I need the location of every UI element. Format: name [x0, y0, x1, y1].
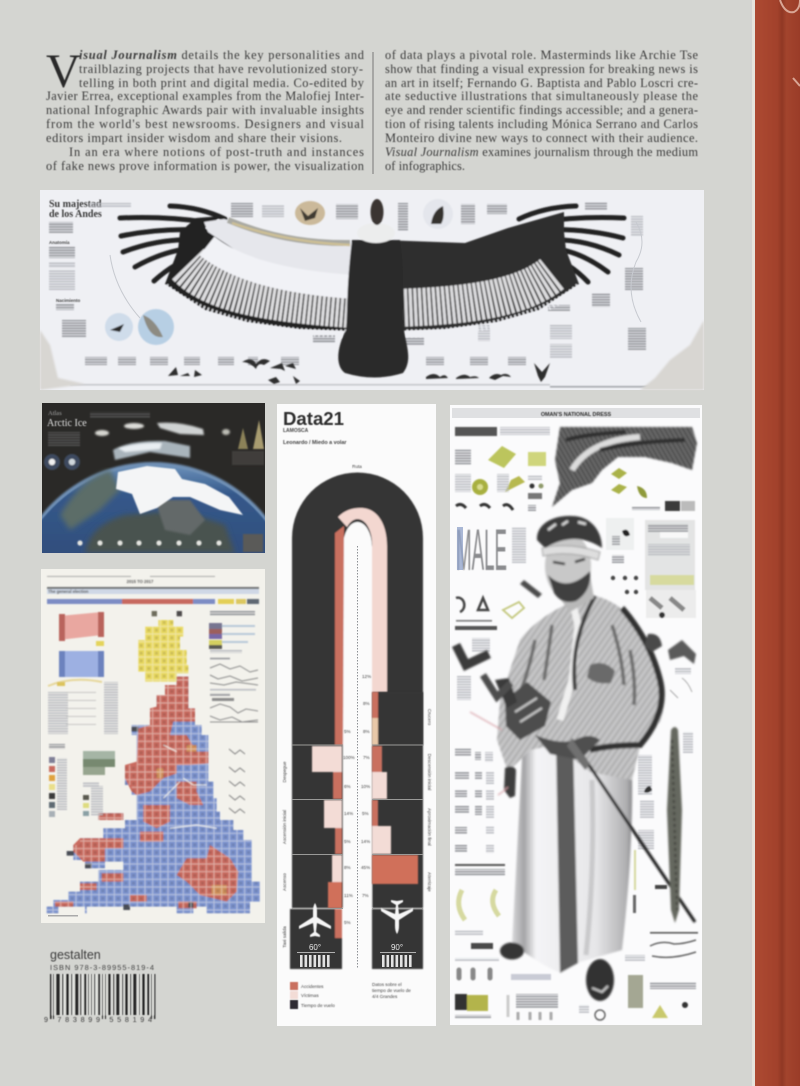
intro text: left column: editors impart insider wisdom and share their visions.: [46, 131, 342, 145]
rotated phase labels: Aproximación final: [427, 808, 432, 846]
beard: [548, 571, 590, 602]
drop cap: V: [46, 45, 81, 98]
Omani man illustration: [456, 516, 696, 1001]
yellow green illustrations: [472, 446, 647, 498]
rotated phase labels: Ascensión inicial: [282, 810, 287, 844]
feet: [500, 942, 524, 960]
intro text: right column: ate seductive illustrations that simultaneously please the: [385, 89, 698, 103]
neck: [550, 575, 594, 612]
cruise section: [332, 855, 342, 882]
percentage labels: 5%: [344, 839, 351, 844]
intro text: right column: eye and render scientific findings accessible; and a genera-: [385, 103, 698, 117]
chart legend: [290, 982, 335, 1009]
intro text: right column: of infographics.: [385, 159, 465, 173]
small flying condors row: [168, 359, 550, 384]
rotated phase labels: Despegue: [282, 761, 287, 782]
UK panel header: [47, 576, 259, 604]
condor heading: Su majestad: [49, 199, 102, 210]
chart legend: Accidentes: [301, 984, 324, 989]
condor heading: Anatomía: [49, 240, 70, 245]
rotated phase labels: Ascenso: [282, 873, 287, 891]
condor text blocks: [49, 202, 700, 388]
UK panel footer: [48, 915, 78, 916]
intro text: left column: [46, 45, 365, 173]
percentage labels: 7%: [363, 755, 370, 760]
section separator lines: [292, 744, 423, 909]
percentage labels: 8%: [363, 729, 370, 734]
percentage labels: 100%: [343, 755, 355, 760]
percentage labels: [343, 674, 371, 925]
head: [370, 199, 384, 225]
intro text: left column: In an era where notions of post-truth and instances: [69, 145, 364, 159]
earth globe: [42, 460, 265, 553]
polar ice: [116, 466, 243, 515]
chart note: [372, 982, 411, 999]
staff: [572, 740, 695, 922]
percentage labels: 6%: [344, 784, 351, 789]
percentage labels: 10%: [361, 784, 370, 789]
intro text: right column: of data plays a pivotal role. Masterminds like Archie Tse: [385, 48, 698, 62]
climb section: [324, 800, 342, 828]
Arctic dot timeline: [77, 534, 263, 552]
barcode: [50, 974, 155, 1019]
lower left diagrams: [455, 732, 698, 1020]
intro text: left column: telling in both print and digital media. Co-edited by: [79, 76, 365, 90]
Data21 heading: Ruta: [352, 464, 362, 469]
dress panel header: OMAN'S NATIONAL DRESS: [541, 412, 612, 418]
condor round insets: [105, 199, 453, 345]
intro text: left column: national Infographic Awards pair with invaluable insights: [46, 103, 364, 117]
Arctic panel title: [47, 410, 87, 429]
icon: takeoff plane: [299, 903, 331, 937]
intro text: right column: Visual Journalism examines journalism through the medium: [385, 145, 698, 159]
intro text: left column: isual Journalism details the key personalities and: [79, 48, 365, 62]
percentage labels: 11%: [344, 893, 353, 898]
arch shaped flight track: [292, 472, 423, 969]
turban: [537, 516, 602, 548]
pale mountains at condor panel edges: [40, 320, 704, 390]
robe: [512, 735, 632, 973]
rotated phase labels: [282, 709, 432, 948]
chart note: 4/4 Grandes: [372, 994, 398, 999]
MALE title: [456, 518, 507, 583]
intro text: right column: Monteiro divine new ways to connect with their audience.: [385, 131, 698, 145]
left wing: [120, 206, 356, 333]
UK panel header: 2015 TO 2017: [127, 579, 154, 584]
chart legend: Víctimas: [301, 993, 319, 998]
panel: Oman national dress infographic: MALE: [456, 518, 507, 583]
panel: Oman national dress infographic: [450, 405, 702, 1025]
intro text: right column: [385, 48, 698, 173]
white inner channel: [343, 522, 372, 969]
publisher name: gestalten: [50, 948, 101, 962]
right upper block: [372, 692, 423, 745]
pink pointer lines: [470, 712, 508, 795]
percentage labels: 45%: [361, 865, 370, 870]
barcode digits: 9 783899 558194: [44, 1015, 152, 1024]
red book spine: [752, 0, 800, 1086]
condor heading: [49, 199, 102, 303]
pink arch stripe: [338, 508, 387, 692]
intro text: left column: of fake news prove information is power, the visualization: [46, 159, 364, 173]
intro text: right column: an art in itself; Fernando G. Baptista and Pablo Loscri cre-: [385, 76, 698, 90]
seat flow charts: [48, 612, 118, 734]
percentage labels: 7%: [362, 893, 369, 898]
flight path arcs: [110, 222, 642, 322]
rotated phase labels: Taxi salida: [282, 926, 287, 948]
panel: Arctic earth infographic: [42, 403, 265, 553]
runway labels: 60°: [309, 943, 321, 952]
rotated phase labels: Crucero: [427, 709, 432, 726]
takeoff section: [312, 746, 342, 772]
small text blocks and diagrams, top: [455, 427, 696, 700]
runway labels: [297, 943, 416, 953]
face: [545, 533, 591, 599]
runway blocks: [290, 909, 342, 969]
sketched map of Oman: [552, 427, 697, 507]
intro text: left column: trailblazing projects that have revolutionized story-: [79, 62, 363, 76]
percentage labels: 5%: [344, 729, 351, 734]
Arctic bar charts: [48, 412, 264, 465]
clouds above the globe: [95, 423, 230, 460]
panel: condor infographic: [40, 190, 704, 390]
left hand: [504, 766, 516, 798]
percentage labels: 8%: [344, 865, 351, 870]
dagger at right: [644, 634, 662, 652]
Data21 heading: Data21: [283, 409, 344, 429]
phase bars: [290, 692, 423, 969]
central dark robe band: [556, 738, 578, 973]
chart legend: Tiempo de vuelo: [301, 1003, 335, 1008]
intro text: right column: show that finding a visual expression for breaking news is: [385, 62, 698, 76]
UK panel header: The general election: [48, 589, 89, 594]
headband: [542, 546, 600, 560]
ISBN: ISBN 978-3-89955-819-4: [50, 963, 154, 972]
column divider: [372, 52, 374, 174]
red left stripe: [335, 526, 344, 745]
Data21 heading: [283, 409, 362, 469]
land masses: [60, 470, 120, 530]
condor heading: de los Andes: [49, 209, 102, 220]
collar tassel: [520, 580, 542, 598]
condor heading: Nacimiento: [56, 298, 81, 303]
Arctic panel title: Atlas: [48, 410, 62, 417]
red constituencies: [125, 677, 208, 795]
scabbard: [667, 727, 682, 923]
Arctic round gauges: [44, 454, 80, 470]
UK legend swatches: [49, 744, 115, 817]
body and tail: [338, 240, 408, 378]
Data21 heading: Leonardo / Miedo a volar: [283, 440, 347, 446]
Arctic panel title: Arctic Ice: [47, 418, 87, 429]
panel: UK election cartogram: [41, 569, 265, 923]
intro text: right column: tion of rising talents including Mónica Serrano and Carlos: [385, 117, 698, 131]
intro text: left column: from the world's best newsrooms. Designers and visual: [46, 117, 365, 131]
rotated phase labels: Aterrizaje: [427, 872, 432, 892]
UK right side charts: [209, 611, 258, 722]
UK small chart multiples: [229, 749, 245, 813]
percentage labels: 14%: [361, 839, 370, 844]
icon: landing plane: [381, 900, 413, 934]
neck collar: [357, 223, 395, 243]
panel: Data21 air accident chart: [277, 404, 436, 1026]
percentage labels: 8%: [363, 701, 370, 706]
orange and dark accents: [157, 745, 227, 895]
chart note: tiempo de vuelo de: [372, 988, 411, 993]
percentage labels: 5%: [362, 811, 369, 816]
blue base of map: [47, 677, 260, 913]
percentage labels: 12%: [362, 674, 371, 679]
percentage labels: 5%: [344, 920, 351, 925]
dark curved pipe object: [456, 645, 489, 665]
belt and dagger: [505, 682, 551, 740]
runway stripes: [300, 955, 412, 967]
dress panel header: [452, 408, 700, 418]
intro text: left column: Javier Errea, exceptional examples from the Malofiej Inter-: [46, 89, 364, 103]
rotated phase labels: Descensión inicial: [427, 754, 432, 790]
runway labels: 90°: [391, 943, 403, 952]
Data21 heading: LAMOSCA: [283, 428, 309, 434]
cell grid overlay: [47, 620, 260, 913]
chart note: Datos sobre el: [372, 982, 402, 987]
cartogram map: [47, 611, 260, 913]
jacket and sleeves: [497, 595, 664, 780]
central dashed axis: [356, 546, 358, 968]
condor illustration: [120, 199, 624, 378]
Scotland yellow block: [138, 620, 188, 682]
right wing: [382, 206, 624, 333]
percentage labels: 14%: [344, 811, 353, 816]
